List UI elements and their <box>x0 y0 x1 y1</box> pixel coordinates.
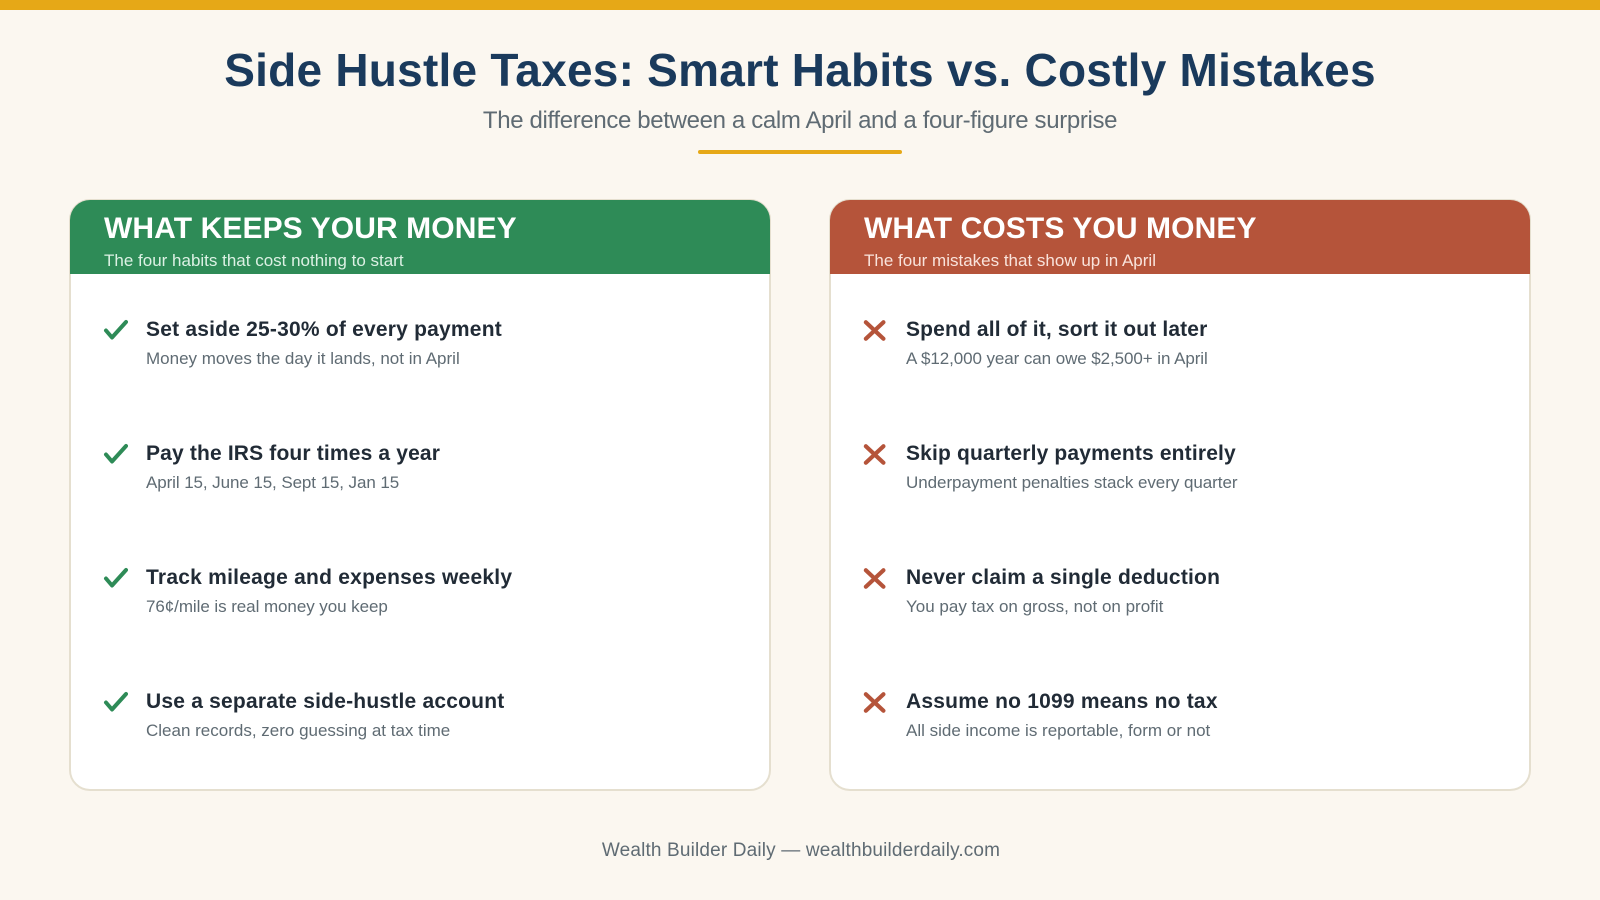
panel: what keeps your money <box>69 199 771 791</box>
habit description: April 15, June 15, Sept 15, Jan 15 <box>146 473 399 492</box>
heading: keeps: WHAT KEEPS YOUR MONEY <box>104 212 517 245</box>
panel header: keeps <box>70 200 770 274</box>
habit title: Set aside 25-30% of every payment <box>146 318 502 341</box>
icon: cross <box>864 320 886 341</box>
mistake title: Assume no 1099 means no tax <box>906 690 1218 713</box>
habit 3 <box>104 566 512 616</box>
mistake title: Never claim a single deduction <box>906 566 1220 589</box>
mistake 1 <box>864 318 1208 368</box>
habit 4 <box>104 690 504 740</box>
icon: check <box>104 320 128 340</box>
footer: Wealth Builder Daily — wealthbuilderdaily.com <box>602 840 1000 861</box>
icon: check <box>104 444 128 464</box>
habit description: 76¢/mile is real money you keep <box>146 597 388 616</box>
icon: cross <box>864 444 886 465</box>
habit description: Clean records, zero guessing at tax time <box>146 721 450 740</box>
habit title: Use a separate side-hustle account <box>146 690 504 713</box>
habit 1 <box>104 318 502 368</box>
panel header: costs <box>830 200 1530 274</box>
panel: what costs you money <box>829 199 1531 791</box>
habit description: Money moves the day it lands, not in April <box>146 349 460 368</box>
subtitle: The difference between a calm April and a four-figure surprise <box>483 107 1117 134</box>
mistake description: All side income is reportable, form or not <box>906 721 1210 740</box>
icon: cross <box>864 568 886 589</box>
icon: check <box>104 692 128 712</box>
mistake description: A $12,000 year can owe $2,500+ in April <box>906 349 1208 368</box>
mistake description: You pay tax on gross, not on profit <box>906 597 1163 616</box>
header subtitle: keeps: The four habits that cost nothing to start <box>104 251 404 270</box>
icon: check <box>104 568 128 588</box>
mistake 2 <box>864 442 1238 492</box>
header subtitle: costs: The four mistakes that show up in April <box>864 251 1156 270</box>
mistake description: Underpayment penalties stack every quarter <box>906 473 1237 492</box>
title underline <box>698 150 902 154</box>
habit title: Pay the IRS four times a year <box>146 442 440 465</box>
mistake title: Spend all of it, sort it out later <box>906 318 1207 341</box>
habit 2 <box>104 442 440 492</box>
top accent bar <box>0 0 1600 10</box>
heading: costs: WHAT COSTS YOU MONEY <box>864 212 1257 245</box>
mistake title: Skip quarterly payments entirely <box>906 442 1236 465</box>
icon: cross <box>864 692 886 713</box>
title: Side Hustle Taxes: Smart Habits vs. Costly Mistakes <box>224 44 1376 96</box>
habit title: Track mileage and expenses weekly <box>146 566 512 589</box>
mistake 4 <box>864 690 1218 740</box>
mistake 3 <box>864 566 1220 616</box>
